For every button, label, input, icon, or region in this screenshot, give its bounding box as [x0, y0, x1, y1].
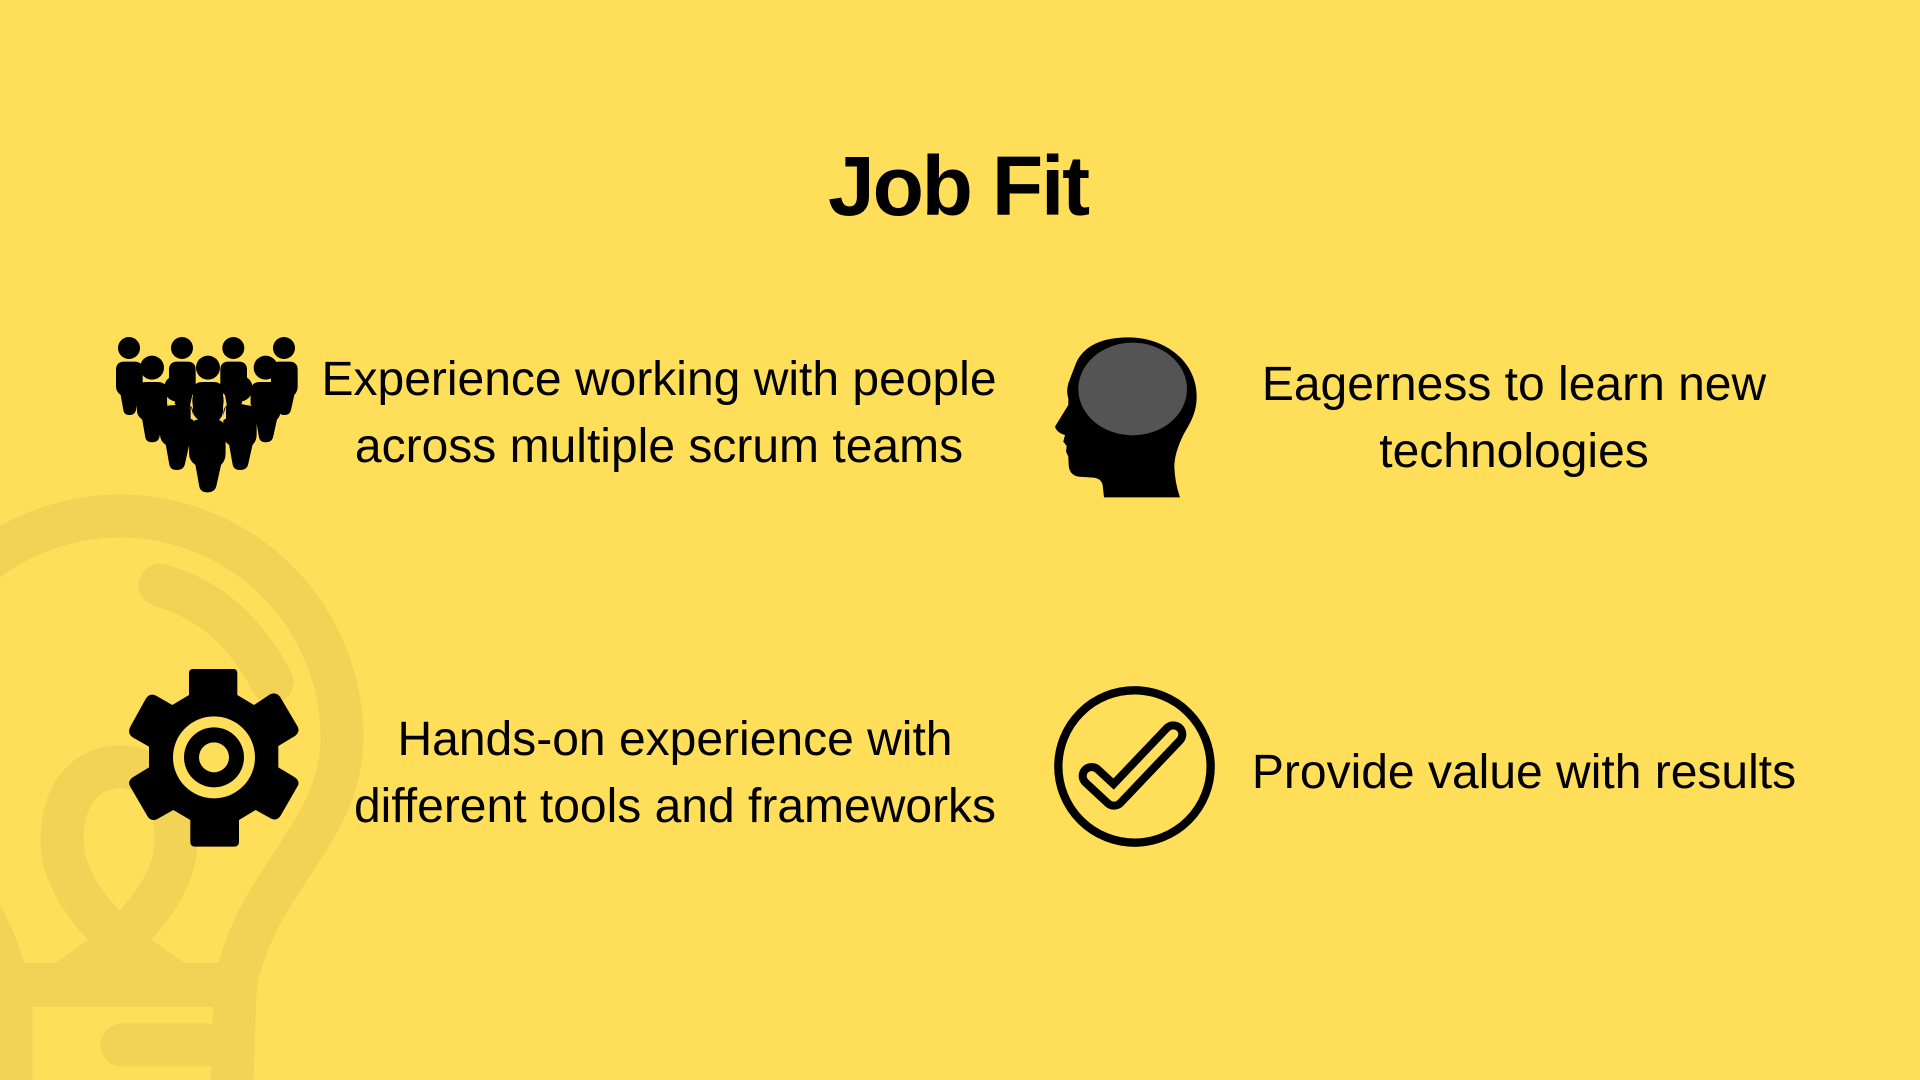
text: people: Experience working with people [321, 353, 997, 406]
text: learning: technologies [1379, 425, 1649, 478]
text: people [321, 353, 997, 473]
text: tools [354, 713, 996, 833]
title: Job Fit [828, 139, 1088, 233]
text: learning: Eagerness to learn new [1262, 358, 1766, 411]
text: tools: different tools and frameworks [354, 780, 996, 833]
text: learning [1262, 358, 1766, 478]
text: people: across multiple scrum teams [355, 420, 963, 473]
text: results: Provide value with results [1252, 746, 1796, 799]
text: tools: Hands-on experience with [398, 713, 952, 766]
